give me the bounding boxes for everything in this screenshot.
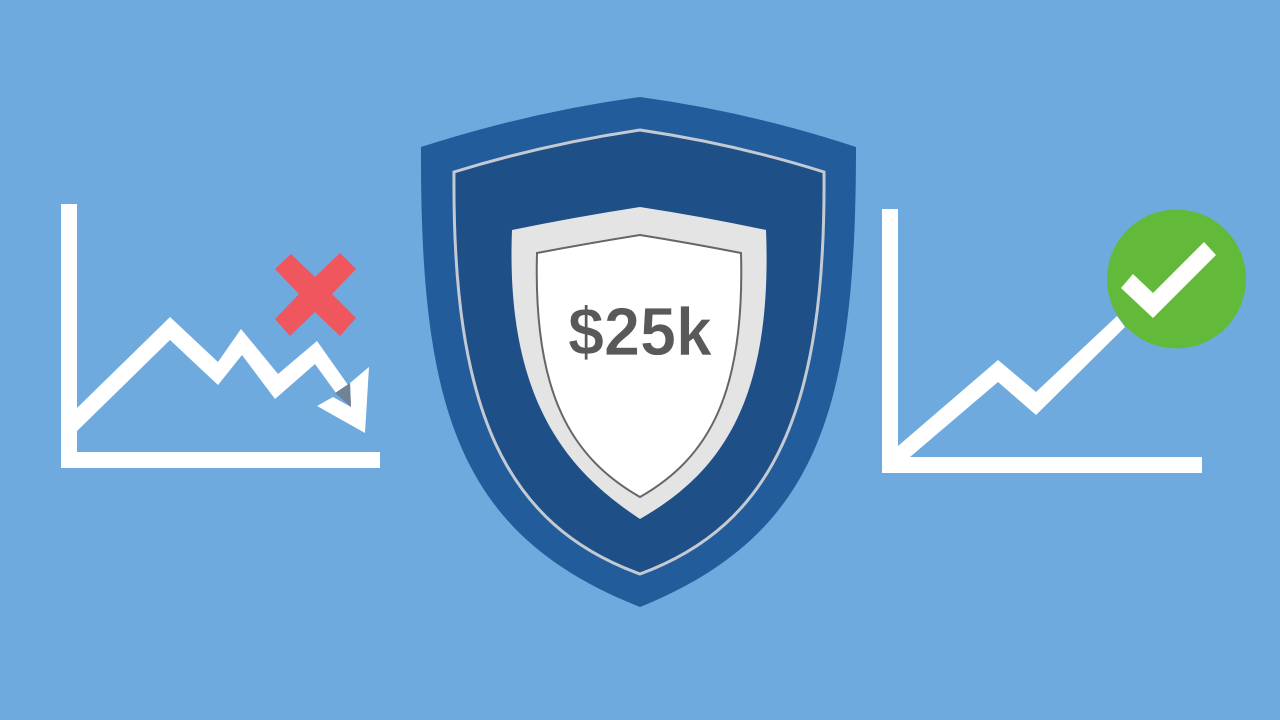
panel: declining chart: [61, 204, 380, 468]
shield: white face: [537, 235, 741, 497]
panel: rising chart: [882, 209, 1246, 473]
amount label: $25k: [568, 294, 712, 370]
chart axes: declining chart: [61, 204, 380, 468]
panel: central shield: [421, 97, 856, 607]
arrow: downward arrowhead: [317, 367, 369, 433]
shield: inner navy with silver outline: [454, 130, 824, 574]
chart line: rising trend: [898, 316, 1125, 457]
icon: green check badge: [1107, 210, 1246, 348]
chart line: declining trend: [77, 317, 348, 431]
icon: red cross: [275, 253, 356, 336]
shield: light grey plate: [511, 207, 767, 519]
shield: outer blue: [421, 97, 856, 607]
chart axes: rising chart: [882, 209, 1202, 473]
